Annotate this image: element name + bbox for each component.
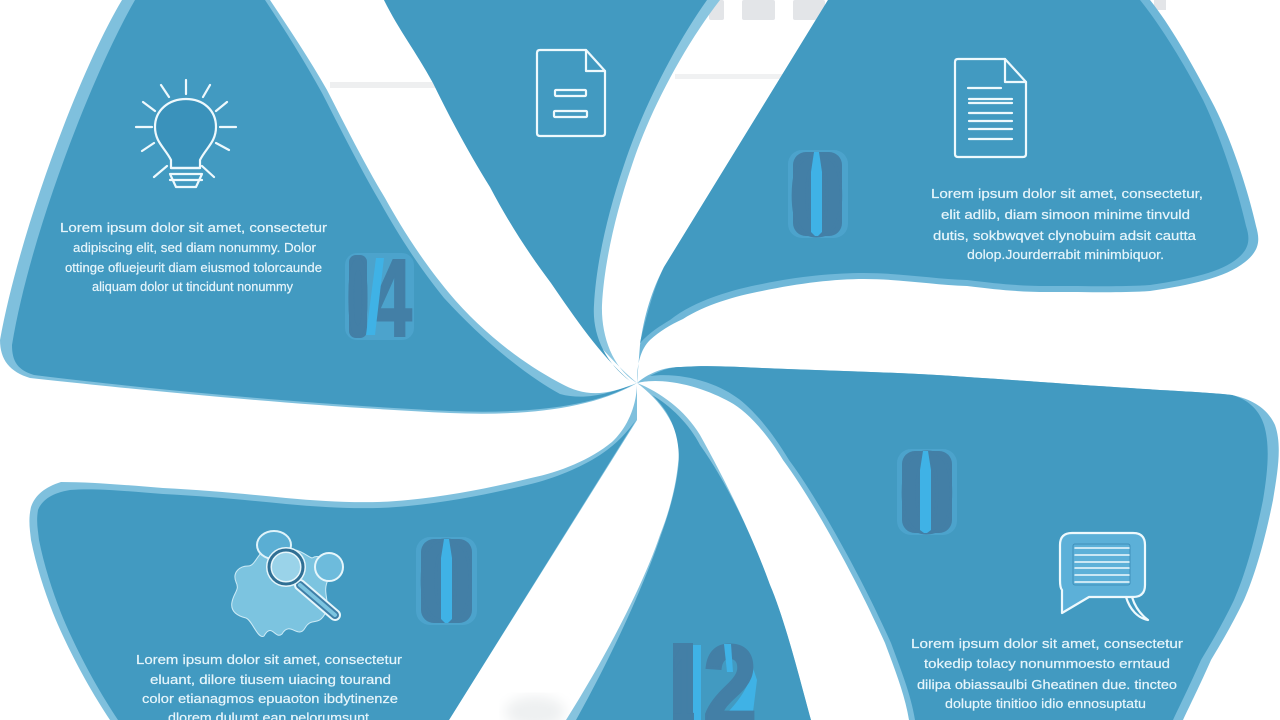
text block 01: dolop.Jourderrabit minimbiquor. <box>967 247 1164 262</box>
bottom centre shape <box>566 383 811 720</box>
number 03: 0 <box>418 518 474 645</box>
text block 04 <box>60 220 328 294</box>
text block 02: dolupte tinitioo idio ennosuptatu <box>945 696 1146 711</box>
text block 02: Lorem ipsum dolor sit amet, consectetur <box>911 636 1184 651</box>
panel 02 shape <box>637 366 1279 720</box>
number 01: 0 <box>789 133 845 260</box>
panel: step 04 <box>0 0 637 414</box>
text block 01 <box>931 186 1203 262</box>
text block 02: dilipa obiassaulbi Gheatinen due. tincteo <box>917 677 1177 692</box>
text block 01: dutis, sokbwqvet clynobuim adsit cautta <box>933 228 1197 243</box>
text block 03: eluant, dilore tiusem uiacing tourand <box>150 672 391 687</box>
icon: magnifier over splash <box>232 531 343 637</box>
panel 04 shape <box>0 0 637 414</box>
top centre shape <box>384 0 720 383</box>
panel: step 03 <box>29 385 637 720</box>
icon: document with text lines <box>955 59 1026 157</box>
icon: speech bubble <box>1060 533 1148 620</box>
text block 04: aliquam dolor ut tincidunt nonummy <box>92 279 293 294</box>
text block 01: elit adlib, diam simoon minime tinvuld <box>941 207 1190 222</box>
text block 03 <box>136 652 403 720</box>
panel: step 02 <box>637 366 1279 720</box>
number 02: 0 <box>899 430 955 557</box>
panel 01 shape <box>637 0 1258 383</box>
text block 04: adipiscing elit, sed diam nonummy. Dolor <box>73 240 317 255</box>
icon: document with two lines <box>537 50 605 136</box>
text block 02 <box>911 636 1184 711</box>
text block 04: ottinge ofluejeurit diam eiusmod tolorcaunde <box>65 260 322 275</box>
panel: step 12 bottom centre <box>566 383 811 720</box>
number 04: 0 <box>347 237 369 360</box>
text block 01: Lorem ipsum dolor sit amet, consectetur, <box>931 186 1203 201</box>
text block 03: Lorem ipsum dolor sit amet, consectetur <box>136 652 403 667</box>
panel: step 01 <box>637 0 1258 383</box>
text block 04: Lorem ipsum dolor sit amet, consectetur <box>60 220 328 235</box>
panel 03 shape <box>29 385 637 720</box>
number 04: 4 <box>370 237 412 360</box>
text block 03: color etianagmos epuaoton ibdytinenze <box>142 691 398 706</box>
text block 02: tokedip tolacy nonummoesto erntaud <box>924 656 1170 671</box>
icon: light bulb <box>136 80 236 187</box>
panel: top centre <box>384 0 720 383</box>
